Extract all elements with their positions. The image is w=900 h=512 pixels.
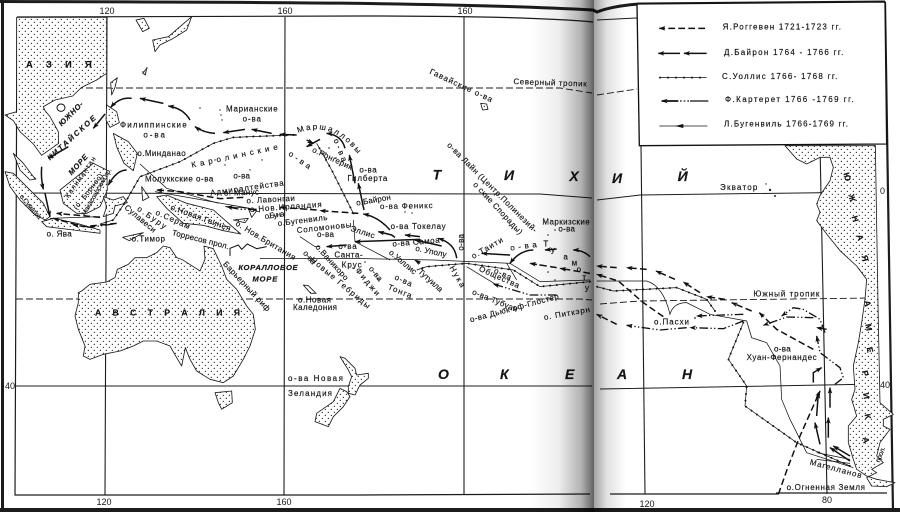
legend item: Wallis: С.Уоллис 1766- 1768 гг. — [722, 72, 837, 81]
label: Marshall Islands: Маршалловы — [296, 124, 360, 154]
label: South China Sea: КИТАЙСКОЕ — [45, 113, 98, 162]
ocean title: line one: Й — [678, 167, 689, 184]
label: Coral Sea: КОРАЛЛОВОЕ — [238, 263, 299, 272]
label: Upolu: о. Уполу — [415, 244, 447, 259]
label: Solomon Islands: Соломоновы — [296, 220, 352, 235]
labels: Australia region — [95, 260, 299, 317]
label: Java: о. Ява — [47, 230, 72, 239]
label: strait: прол. — [875, 446, 887, 463]
label: Santa Cruz: о-ва — [338, 242, 357, 251]
labels: Melanesia and Polynesia — [288, 124, 733, 398]
label: Tierra del Fuego: о.Огненная Земля — [787, 483, 865, 492]
Sumatra — [5, 172, 50, 220]
routes: central Pacific — [260, 133, 590, 295]
Tasmania — [215, 391, 232, 409]
Taiwan — [111, 78, 117, 95]
coordinate labels: 40 — [880, 380, 890, 390]
label: Pitcairn: о. Питкэрн — [543, 305, 591, 322]
label: Tuamotu: о-ва — [510, 240, 538, 253]
label: Phoenix Islands: о-ва Феникс — [380, 201, 433, 211]
label: Admiralty Islands: Адмиралтейства — [210, 178, 285, 198]
label: Ellice: Эллис — [349, 224, 376, 240]
coordinate labels: 120 — [639, 499, 655, 509]
coordinate labels: 160 — [277, 6, 293, 16]
label: Line Islands: о-ва Лайн (Центр.Полинезий- — [445, 141, 539, 235]
ocean title: line one: Т — [433, 166, 443, 182]
land: Asia and western islands — [5, 17, 267, 256]
Moluccas — [142, 187, 149, 201]
label: Caroline Islands: Каролинские — [191, 142, 279, 170]
labels: east Pacific — [654, 290, 887, 492]
legend item: Bougainville: Л.Бугенвиль 1766-1769 гг. — [724, 119, 848, 128]
label: New Britain: о. Нов.Британия — [234, 219, 297, 262]
label: Santa Cruz: Крус — [342, 260, 362, 269]
coordinate labels: 160 — [276, 497, 292, 507]
label: South China Sea — [45, 99, 98, 177]
label: Fiji: Фиджи — [353, 266, 382, 297]
Hainan — [57, 104, 65, 111]
label: Gilbert Islands: Гилберта — [347, 174, 388, 183]
label: America: АМЕРИКА — [860, 300, 876, 444]
label: Tokelau: о-ва Токелау — [391, 222, 446, 231]
label: Nuku: Нука — [448, 264, 467, 289]
label: Juan Fernandez — [747, 345, 817, 362]
label: New Hebrides: о-ва — [301, 249, 318, 267]
label: Marquesas: Маркизские — [542, 218, 590, 227]
label: New Guinea: о.Новая Гвинея — [169, 203, 232, 233]
label: Society Islands: о-ва — [492, 266, 513, 282]
label: Buna: о.Буна — [264, 209, 286, 221]
label: Marquesas — [542, 218, 590, 233]
label: Great Barrier Reef: Барьерный риф — [221, 260, 272, 314]
label: South (America): ЮЖНАЯ — [841, 171, 871, 262]
ocean title: line one: И — [612, 170, 623, 186]
label: Philippines: о-ва — [143, 130, 166, 139]
icon: Hawaii island — [481, 103, 488, 110]
label: South China Sea: МОРЕ — [66, 152, 90, 177]
Borneo — [60, 163, 107, 213]
label: Philippines: Филиппинские — [120, 120, 187, 129]
book gutter shading — [530, 0, 626, 512]
label: Bougainville: о.Бугенвиль — [277, 213, 328, 228]
label: New Zealand — [288, 374, 343, 398]
label: Mindanao: о.Минданао — [137, 149, 186, 158]
label: Tonga: Тонга — [387, 283, 414, 300]
label: Santa Cruz — [334, 242, 363, 269]
routes: western Pacific — [41, 98, 297, 227]
label: Tonga: о-ва — [393, 273, 414, 289]
Sulawesi — [103, 197, 127, 217]
label: New Caledonia — [293, 296, 337, 312]
coordinate labels: 0 — [880, 186, 885, 196]
route: Bougainville — [260, 220, 590, 285]
legend panel — [637, 2, 887, 146]
label: Strait of Magellan: Магелланов — [809, 458, 863, 480]
Papua coast line — [230, 244, 267, 256]
label: Kalimantan: (о. Борнео) — [73, 173, 105, 211]
label: Seram: о.Серам — [154, 208, 191, 231]
land: New Zealand, New Caledonia — [303, 285, 368, 427]
route: Carteret — [73, 207, 257, 227]
labels: Hawaii and northern tropic — [428, 67, 587, 110]
routes: eastern Pacific and South America — [597, 266, 853, 494]
label: Duke of Gloucester: о-ва Дьюк-оф-Глостер — [469, 292, 560, 324]
Japan — [136, 17, 192, 75]
label: Southern tropic: Южный тропик — [753, 290, 820, 299]
label: Caroline Islands: о-ва — [287, 149, 313, 171]
route: Bougainville — [597, 281, 853, 468]
label: Vanikoro: о.Ваникоро — [314, 243, 351, 283]
label: Society Islands: Общества — [478, 264, 521, 290]
label: Caroline Islands — [191, 142, 313, 171]
label: Lavongai: о. Лавонгаи — [246, 194, 295, 205]
label: island group: о-ва — [456, 233, 465, 251]
label: Rongerik: о.Ронгерик — [311, 145, 354, 172]
label: Kalimantan — [64, 156, 105, 211]
coordinate labels: 120 — [99, 6, 115, 16]
label: Kalimantan: Калимантан — [64, 156, 98, 199]
label: New Hebrides: Новые Гебриды — [309, 255, 372, 311]
North Island — [340, 357, 368, 395]
label: Manus: о. Манус — [224, 187, 259, 198]
New Britain and New Ireland — [233, 208, 257, 223]
land: South America — [785, 146, 895, 487]
coordinate labels: 40 — [5, 381, 15, 391]
ocean title: line one: Х — [568, 168, 580, 184]
label: New Caledonia: о.Новая — [298, 296, 331, 305]
route: Carteret — [493, 284, 557, 295]
South Island — [315, 388, 350, 427]
label: Samoa: о-ва Самоа — [392, 236, 441, 249]
route: Carteret — [627, 308, 843, 384]
New Guinea — [157, 195, 241, 234]
labels: western Pacific — [18, 59, 352, 262]
coordinate labels: 80 — [822, 495, 832, 505]
Asia — [5, 17, 107, 155]
coordinate labels: 160 — [457, 6, 473, 16]
legend item: Carteret: Ф.Картерет 1766 -1769 гг. — [725, 95, 854, 104]
ocean title: line one: И — [504, 167, 515, 183]
label: Tuamotu: Туамоту — [543, 240, 589, 293]
label: New Zealand: Зеландия — [288, 389, 332, 398]
route: Byron — [307, 133, 590, 263]
label: Tonga — [387, 273, 414, 300]
label: Fiji: о-ва — [367, 264, 385, 283]
label: Equator: Экватор — [720, 183, 758, 192]
label: Timor: о.Тимор — [132, 235, 166, 244]
route: Roggeven dashed — [53, 190, 243, 227]
New Caledonia — [303, 285, 316, 293]
route: Wallis — [317, 143, 590, 287]
label: Coral Sea — [238, 263, 299, 283]
ocean title: line two: Е — [565, 366, 575, 382]
label: Mariana Islands: о-ва — [243, 115, 262, 124]
labels: equator and South — [720, 171, 871, 262]
label: Line Islands: о ские Спорады) — [471, 180, 525, 237]
route: Roggeven — [597, 266, 820, 494]
Timor — [123, 233, 143, 241]
label: New Caledonia: Каледония — [293, 303, 337, 312]
ocean title: line two — [438, 366, 693, 382]
label: Torres Strait: Торресов прол. — [171, 228, 230, 251]
label: Gilbert Islands: о-ва — [359, 165, 377, 174]
route: Roggeven — [280, 207, 590, 273]
label: South China Sea: ЮЖНО- — [57, 99, 85, 128]
label: Juan Fernandez: Хуан-Фернандес — [747, 353, 817, 362]
label: Moluccas: Молуккские о-ва — [145, 175, 214, 184]
label: Asia: А З И Я — [26, 59, 92, 69]
ocean title: line two: О — [438, 366, 449, 382]
label: Wallis: о.Уоллис — [387, 248, 418, 276]
land: Australia, Tasmania — [75, 246, 255, 409]
label: Marquesas: о-ва — [558, 224, 576, 233]
label: Tuamotu — [510, 240, 589, 293]
Philippines — [106, 105, 137, 171]
Malay peninsula — [13, 153, 36, 180]
label: Santa Cruz: Санта- — [334, 250, 363, 259]
route: Byron north-west arc — [41, 98, 297, 217]
label: Australia: А В С Т Р А Л И Я — [95, 307, 240, 317]
label: Tahiti: о.Таити — [470, 235, 505, 261]
label: Easter Island: о.Пасхи — [654, 317, 689, 326]
label: Philippines — [120, 120, 187, 139]
label: Solomon Islands: о-ва — [317, 230, 335, 239]
ocean title: line two: К — [500, 366, 510, 382]
label: Coral Sea: МОРЕ — [252, 274, 278, 283]
label: Mariana Islands: Марианские — [226, 105, 278, 114]
legend item: Roggeven: Я.Роггевен 1721-1723 гг. — [723, 22, 841, 31]
label: Marshall Islands: о-ва — [331, 137, 349, 164]
ocean title: line two: А — [616, 366, 627, 382]
label: Tutuila: Тутуила — [416, 267, 445, 294]
label: Makassar Strait: Макассарский пр. — [80, 167, 113, 217]
ocean title: line one — [433, 166, 689, 186]
label: Mariana Islands — [226, 105, 278, 124]
label: Sumatra: о.Суматра — [18, 193, 43, 221]
label: Tubuai: о-ва Тубуаи — [471, 288, 519, 314]
coordinate labels: 120 — [96, 497, 112, 507]
legend item: Byron: Д.Байрон 1764 - 1766 гг. — [724, 48, 843, 57]
Java — [42, 218, 100, 233]
Australia — [75, 246, 255, 383]
route: Byron — [813, 368, 850, 461]
route: Wallis — [597, 287, 850, 466]
ocean title: line two: Н — [682, 366, 693, 382]
route: Wallis line — [100, 135, 293, 224]
label: Juan Fernandez: о-ва — [774, 345, 791, 354]
label: Admiralty Islands: о-ва — [233, 171, 251, 180]
label: New Ireland: о.Нов.Ирландия — [250, 200, 322, 214]
label: Buru: о.Буру — [136, 204, 168, 231]
label: Byron Island: о.Байрон — [355, 193, 391, 208]
legend item: Bougainville — [659, 119, 848, 128]
label: Northern tropic: Северный тропик — [513, 77, 587, 89]
label: Hawaiian Islands: Гавайские о-ва — [428, 67, 494, 104]
small islands — [142, 67, 776, 319]
label: New Zealand: о-ва Новая — [288, 374, 343, 383]
label: Sulawesi: Сулавеси — [123, 203, 158, 235]
route: Bougainville line — [50, 164, 260, 218]
label: Gilbert Islands — [347, 165, 388, 183]
